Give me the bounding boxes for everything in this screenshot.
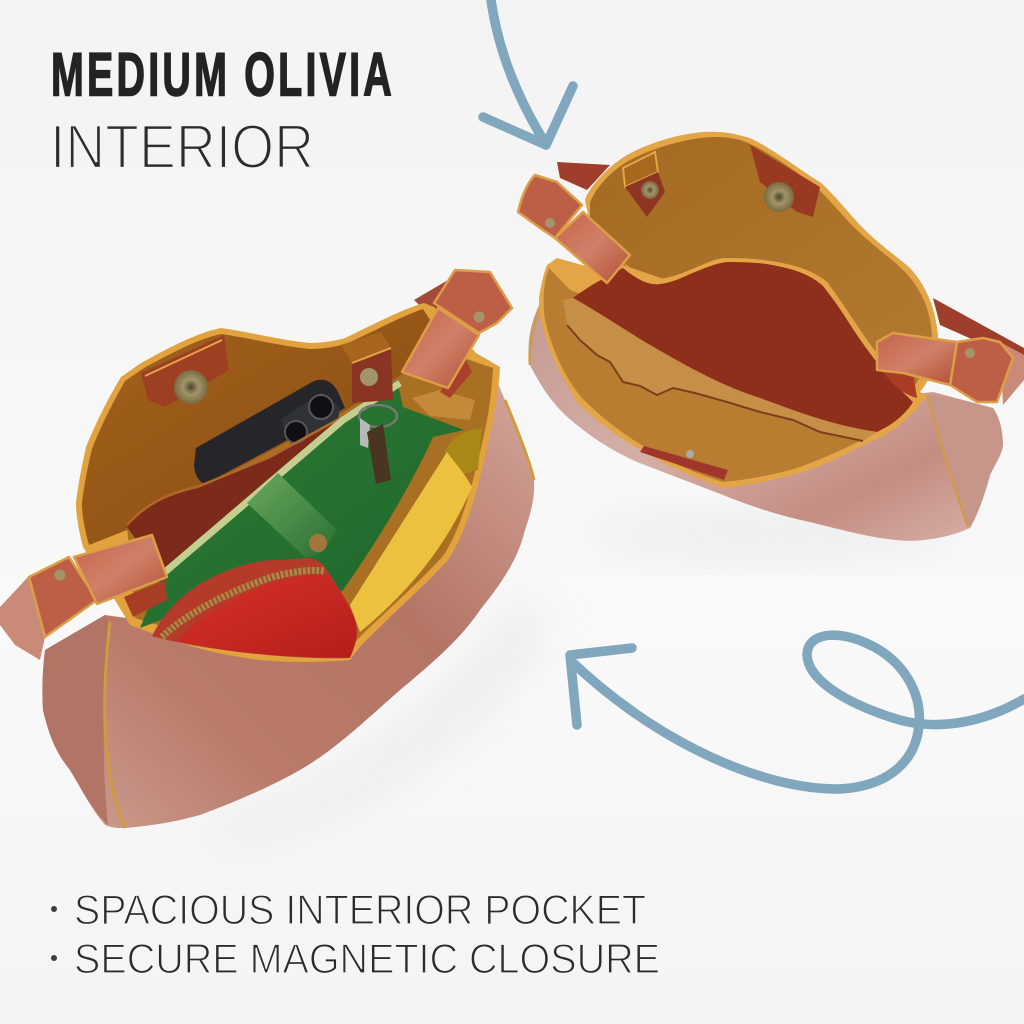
arrow: looping pointing to filled bag [570,635,1024,789]
item: wallet green edge [165,383,400,572]
strap: top buckle [402,270,512,398]
strap: left buckle [518,175,630,283]
interior rim [76,303,500,662]
arrow: top pointing to open bag [483,0,573,145]
snap [764,182,794,212]
front pocket suede [544,268,868,482]
back strap [414,280,470,325]
magnetic tab, right [341,332,393,403]
heading: medium olivia: MEDIUM OLIVIA [51,40,395,108]
outer leather body [529,298,1003,541]
bullet: spacious interior pocket: SPACIOUS INTERIOR POCKET [74,886,646,933]
pocket flap, lighter suede [563,298,877,441]
snap [174,370,208,404]
suede fringe [412,390,475,420]
front interior suede [127,350,493,652]
item: snap [309,534,327,552]
bullet list [51,886,660,982]
strap: right buckle [877,333,1024,405]
shadow [200,590,550,845]
magnetic tab, left [141,335,229,407]
side panel shading [927,395,1001,528]
item: green wallet [140,380,464,628]
item: phone [194,380,345,484]
pocket edge [127,414,348,525]
interior pocket, red leather [573,262,913,432]
inner pocket, dark red [127,414,345,570]
strap: left buckle [0,535,167,660]
item: keys [359,405,397,484]
suede back wall [82,309,450,545]
front bag seam [530,302,968,527]
shadow [580,515,960,555]
front tab [640,446,728,480]
title [50,40,395,182]
bullet: secure magnetic closure: SECURE MAGNETIC CLOSURE [74,935,660,982]
suede back wall [590,137,932,385]
phone lenses [285,421,307,443]
back strap [557,162,1024,372]
phone camera module [280,392,340,446]
heading: interior: INTERIOR [50,113,314,182]
bag seams [105,400,534,828]
magnetic tab, back right [750,145,820,217]
item: red zip pouch [152,558,357,658]
scalloped pocket edge [567,325,863,441]
bag: left, filled with items [0,270,550,845]
item: yellow wallet [350,428,482,632]
snap [360,368,378,386]
bag: right, empty and open [518,132,1024,555]
outer leather body [42,365,534,828]
magnetic tab, back left [623,152,665,217]
snap [641,181,659,199]
item: zipper [162,570,324,637]
interior rim [539,132,938,488]
item: green strap [247,473,337,558]
pocket top edge [623,258,880,380]
side panel shading [42,615,110,825]
